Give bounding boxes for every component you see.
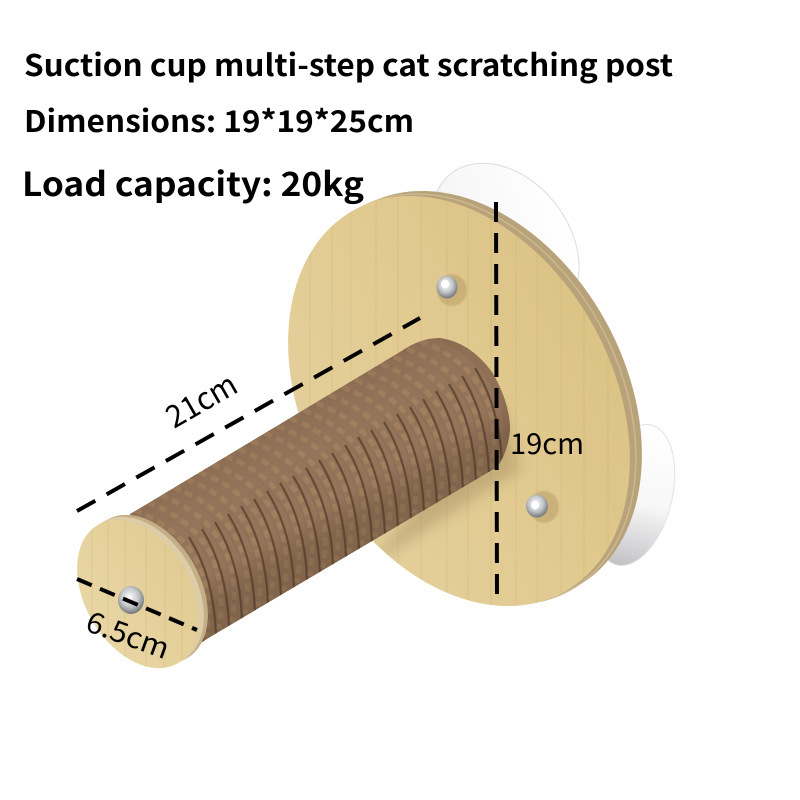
disc rim [231,131,711,661]
dimension: 6.5cm end diameter: 6.5cm [81,599,176,668]
cap face [52,498,224,690]
title: Suction cup multi-step cat scratching post [24,41,673,85]
dimension: 19cm diameter: 19cm [510,421,584,463]
dimension: 6.5cm end diameter [77,579,197,668]
dimension: 21cm length: 21cm [156,360,244,437]
wooden wall disc [288,191,642,606]
icon: cap screw [118,586,144,614]
dimension: 21cm length [77,318,420,511]
icon: lower suction cup [580,416,688,574]
disc face [219,136,699,666]
cap bevel [61,493,233,685]
icon: upper bolt [436,274,467,306]
dimensions line: Dimensions: 19*19*25cm [24,97,414,141]
icon: upper suction cup [400,134,610,352]
load capacity line: Load capacity: 20kg [22,158,364,206]
rope post [130,338,510,642]
icon: lower bolt [526,491,559,523]
post end cap [77,514,208,668]
